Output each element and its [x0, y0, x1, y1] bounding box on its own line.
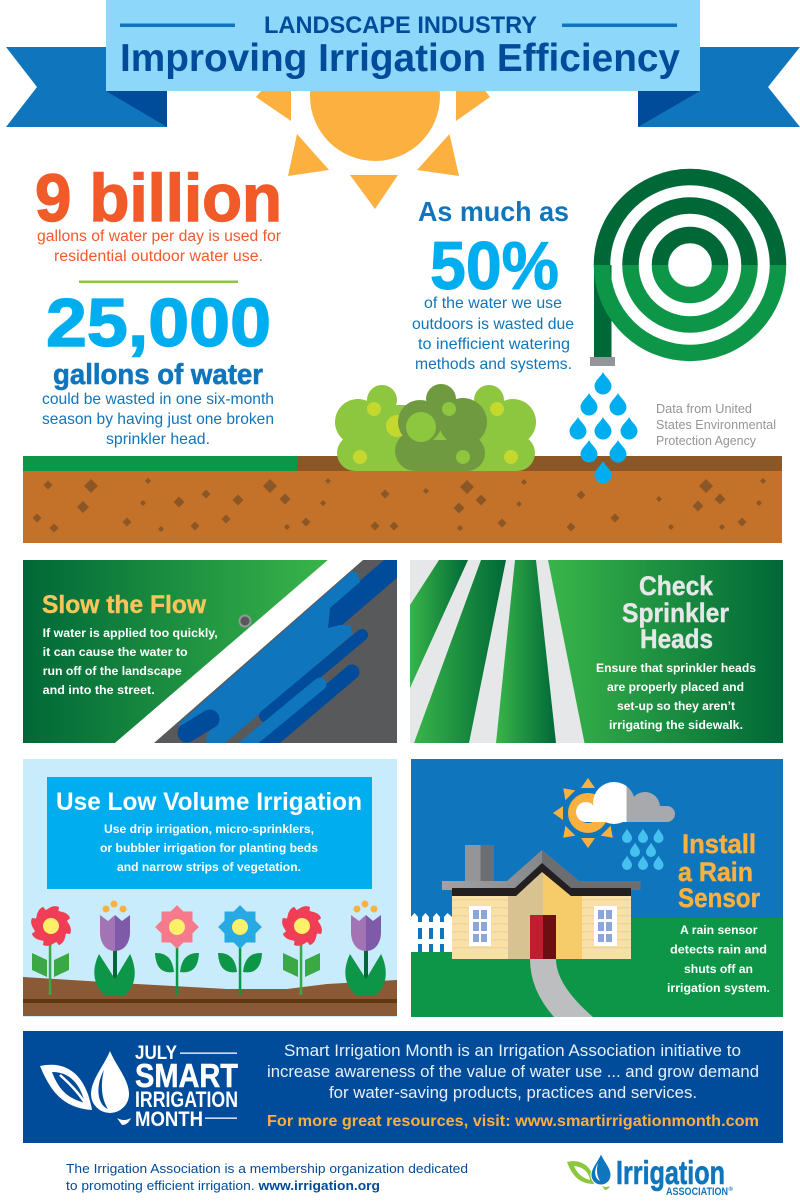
panel: smart irrigation month footer [23, 1031, 783, 1143]
icon: house [442, 845, 640, 1017]
flower: purple tulip [94, 900, 135, 995]
body text: it can cause the water to [43, 645, 188, 659]
logo: irrigation association: Irrigation [616, 1154, 725, 1191]
data source note [656, 402, 776, 448]
body text: and into the street. [43, 683, 155, 697]
soil ground strip [23, 456, 782, 543]
stat: 25,000 gallons: gallons of water [53, 359, 263, 391]
body text: are properly placed and [607, 680, 744, 694]
stat: as much as 50%: As much as [418, 196, 569, 227]
heading [678, 829, 760, 913]
flower bed soil [23, 977, 397, 1016]
stat: 9 billion: gallons of water per day is used for [37, 228, 281, 245]
flower: purple tulip [345, 900, 386, 995]
body text [667, 923, 770, 995]
heading: Check [639, 571, 714, 601]
flower: red [31, 906, 71, 995]
stat: 25,000 gallons: could be wasted in one six-month [42, 391, 274, 408]
panel: install a rain sensor [411, 759, 783, 1017]
body text: irrigating the sidewalk. [609, 718, 743, 732]
heading box [47, 777, 372, 889]
title kicker: LANDSCAPE INDUSTRY [264, 12, 537, 39]
heading: a Rain [678, 857, 753, 887]
heading: Slow the Flow [42, 591, 207, 619]
body text: detects rain and [670, 942, 767, 956]
flower: red [282, 906, 322, 995]
sun [256, 31, 490, 209]
body text [43, 626, 218, 697]
panel: use low volume irrigation [23, 759, 397, 1017]
logo: irrigation association [567, 1153, 734, 1198]
heading box: and narrow strips of vegetation. [117, 860, 301, 874]
stat: 25,000 gallons: sprinkler head. [106, 431, 210, 448]
association note [66, 1161, 468, 1193]
body text [596, 661, 756, 732]
title ribbon [6, 0, 800, 127]
icon: rain drops [622, 828, 664, 870]
stat: 9 billion: residential outdoor water use. [54, 248, 263, 265]
icon: water drops [570, 372, 638, 484]
stat: as much as 50%: methods and systems. [415, 356, 572, 373]
body text: shuts off an [684, 962, 753, 976]
description text: increase awareness of the value of water use ... and grow demand [267, 1063, 759, 1081]
stat: 25,000 gallons [42, 285, 274, 448]
heading box: or bubbler irrigation for planting beds [100, 841, 318, 855]
flower: blue [218, 905, 262, 995]
data source note: Data from United [656, 402, 752, 416]
main title: Improving Irrigation Efficiency [120, 37, 680, 80]
stat: 9 billion: 9 billion [35, 161, 282, 236]
logo: irrigation association: ASSOCIATION [666, 1186, 728, 1198]
description text: Smart Irrigation Month is an Irrigation Association initiative to [284, 1042, 741, 1060]
icon: sun and cloud [553, 778, 675, 848]
stat: 25,000 gallons: 25,000 [46, 285, 271, 361]
stat: as much as 50%: of the water we use [424, 295, 562, 312]
association note: The Irrigation Association is a membership organization dedicated [66, 1161, 468, 1176]
stat: as much as 50%: 50% [430, 228, 559, 304]
heading: Heads [640, 624, 713, 654]
panel: check sprinkler heads [410, 560, 783, 743]
description text: for water-saving products, practices and services. [329, 1084, 697, 1102]
logo: smart irrigation month: SMART [135, 1057, 238, 1094]
panel: slow the flow [23, 560, 397, 743]
flower: pink [155, 905, 199, 995]
logo: smart irrigation month: JULY [135, 1042, 177, 1064]
runoff water [177, 560, 397, 743]
body text: set-up so they aren’t [617, 699, 735, 713]
data source note: Protection Agency [656, 434, 757, 448]
logo: smart irrigation month [40, 1042, 238, 1131]
heading box: Use drip irrigation, micro-sprinklers, [104, 822, 314, 836]
body text: irrigation system. [667, 981, 770, 995]
association note: to promoting efficient irrigation. www.irrigation.org [66, 1178, 380, 1193]
description text [267, 1042, 759, 1102]
resources link: For more great resources, visit: www.smartirrigationmonth.com [267, 1113, 759, 1130]
data source note: States Environmental [656, 418, 776, 432]
heading: Install [682, 829, 756, 859]
logo: smart irrigation month: IRRIGATION [135, 1087, 238, 1112]
stat: as much as 50%: to inefficient watering [418, 336, 570, 353]
heading: Sensor [678, 883, 760, 913]
body text: run off of the landscape [43, 664, 182, 678]
heading: Sprinkler [622, 598, 729, 628]
logo: irrigation association: ® [728, 1186, 734, 1193]
icon: bushes [335, 384, 536, 471]
stat: as much as 50% [412, 196, 574, 373]
logo: smart irrigation month: MONTH [135, 1108, 203, 1131]
icon: coiled hose [590, 177, 778, 366]
body text: If water is applied too quickly, [43, 626, 218, 640]
icon: picket fence [411, 913, 452, 952]
stat: as much as 50%: outdoors is wasted due [412, 316, 574, 333]
body text: A rain sensor [680, 923, 758, 937]
stat: 25,000 gallons: season by having just one broken [42, 411, 274, 428]
heading box: Use Low Volume Irrigation [56, 788, 362, 816]
body text: Ensure that sprinkler heads [596, 661, 756, 675]
heading [622, 571, 729, 654]
